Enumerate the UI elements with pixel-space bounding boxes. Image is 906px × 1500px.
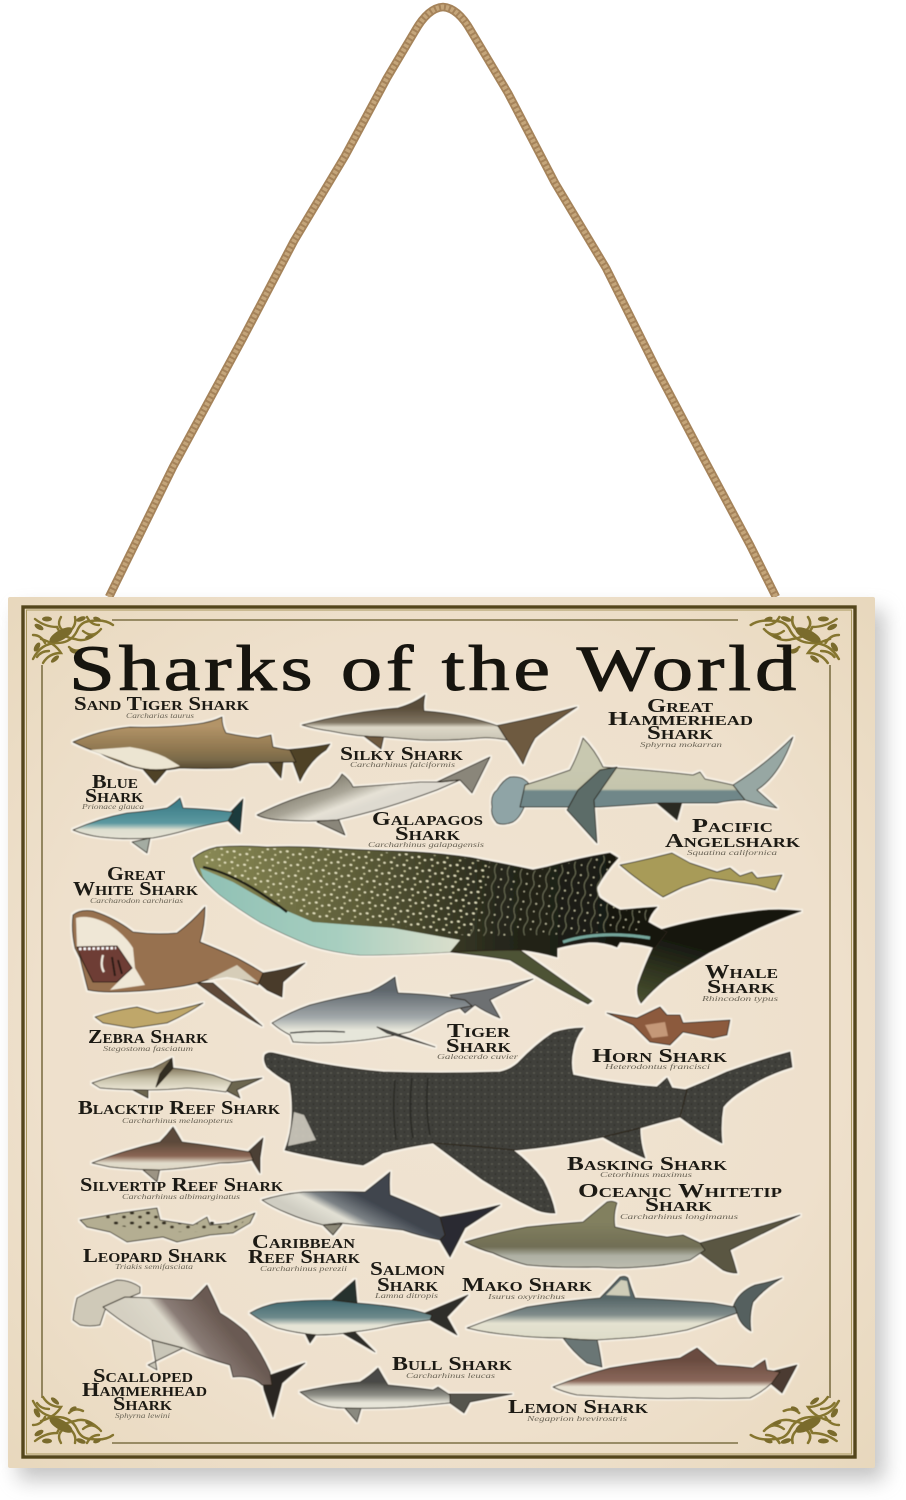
- label: great hammerhead shark: Shark: [647, 722, 713, 744]
- label: sand tiger shark: Sand Tiger Shark: [74, 693, 249, 715]
- label: oceanic whitetip shark: Carcharhinus longimanus: [620, 1213, 738, 1221]
- label: scalloped hammerhead shark: [82, 1365, 207, 1420]
- shark: pacific angelshark: [620, 853, 782, 897]
- label: tiger shark: Galeocerdo cuvier: [437, 1053, 518, 1061]
- label: great white shark: Great: [107, 863, 166, 885]
- teal belly stripe: [563, 935, 650, 942]
- label: scalloped hammerhead shark: Sphyrna lewini: [115, 1412, 170, 1420]
- label: silvertip reef shark: Carcharhinus albimarginatus: [122, 1193, 240, 1201]
- label: great white shark: White Shark: [73, 878, 198, 900]
- label: mako shark: Mako Shark: [462, 1274, 592, 1296]
- label: whale shark: [700, 961, 778, 1003]
- label: caribbean reef shark: Caribbean: [252, 1231, 355, 1253]
- label: oceanic whitetip shark: Oceanic Whitetip: [578, 1180, 783, 1202]
- title: Sharks of the World: [69, 633, 800, 705]
- label: caribbean reef shark: [248, 1231, 360, 1273]
- belly: [200, 868, 460, 955]
- label: salmon shark: Salmon: [370, 1258, 445, 1280]
- pectoral fin: [433, 1143, 555, 1213]
- label: zebra shark: Zebra Shark: [88, 1026, 208, 1048]
- label: pacific angelshark: [665, 815, 800, 857]
- all shark illustrations: [72, 695, 801, 1422]
- label: blue shark: Shark: [85, 785, 143, 807]
- label: galapagos shark: Galapagos: [372, 808, 483, 830]
- label: whale shark: Rhincodon typus: [700, 995, 778, 1003]
- shark: tiger: [272, 977, 533, 1047]
- spot pattern: [198, 848, 490, 936]
- shark: sand tiger: [73, 717, 330, 783]
- corner ornament top left: [32, 615, 113, 664]
- label: caribbean reef shark: Reef Shark: [248, 1246, 360, 1268]
- label: basking shark: [567, 1153, 727, 1179]
- shark: horn: [607, 1007, 730, 1045]
- label: horn shark: Horn Shark: [592, 1045, 727, 1067]
- shark: galapagos: [257, 757, 490, 835]
- shark: leopard: [80, 1208, 255, 1242]
- label: scalloped hammerhead shark: Scalloped: [93, 1365, 193, 1387]
- label: whale shark: Whale: [705, 961, 778, 983]
- label: galapagos shark: [368, 808, 484, 849]
- label: oceanic whitetip shark: Shark: [645, 1194, 712, 1216]
- label: oceanic whitetip shark: [578, 1180, 783, 1221]
- label: mako shark: Isurus oxyrinchus: [486, 1293, 565, 1301]
- shark: oceanic whitetip: [465, 1201, 800, 1273]
- label: silky shark: Carcharhinus falciformis: [350, 761, 455, 769]
- shark: silvertip reef: [92, 1127, 263, 1182]
- label: great hammerhead shark: Great: [647, 695, 714, 717]
- label: caribbean reef shark: Carcharhinus perezii: [260, 1265, 347, 1273]
- label: great white shark: Carcharodon carcharias: [90, 897, 183, 905]
- label: zebra shark: Stegostoma fasciatum: [103, 1045, 193, 1053]
- pectoral fin: [450, 936, 592, 1004]
- label: bull shark: Carcharhinus leucas: [406, 1372, 495, 1380]
- shark: scalloped hammerhead: [73, 1280, 305, 1417]
- label: great hammerhead shark: [608, 695, 753, 749]
- shark: whale: [193, 846, 801, 1004]
- label: galapagos shark: Shark: [395, 823, 460, 845]
- mouth: [203, 867, 287, 912]
- body: [193, 846, 667, 957]
- body: [264, 1028, 687, 1165]
- label: blacktip reef shark: Carcharhinus melanopterus: [122, 1117, 233, 1125]
- label: blue shark: Prionace glauca: [81, 803, 145, 811]
- board drop shadow: [18, 610, 884, 1480]
- label: basking shark: Basking Shark: [567, 1153, 727, 1175]
- tail and anal fin: [603, 1052, 792, 1158]
- outer border frame: [23, 607, 855, 1457]
- rear mesh pattern: [470, 854, 652, 936]
- shark: basking: [264, 1028, 792, 1213]
- label: scalloped hammerhead shark: Shark: [113, 1393, 172, 1415]
- label: great hammerhead shark: Hammerhead: [608, 708, 753, 730]
- shark: zebra: [95, 1003, 203, 1028]
- label: salmon shark: Lamna ditropis: [374, 1292, 438, 1300]
- label: blue shark: Blue: [92, 771, 138, 793]
- label: bull shark: [392, 1353, 512, 1380]
- label: bull shark: Bull Shark: [392, 1353, 512, 1375]
- tail: [637, 910, 801, 1003]
- label: lemon shark: [508, 1396, 648, 1423]
- label: pacific angelshark: Angelshark: [665, 830, 800, 852]
- label: whale shark: Shark: [707, 976, 775, 998]
- label: tiger shark: [437, 1020, 518, 1061]
- label: galapagos shark: Carcharhinus galapagensis: [368, 841, 484, 849]
- gill slits: [394, 1078, 430, 1140]
- label: tiger shark: Tiger: [447, 1020, 511, 1042]
- corner ornament top right: [751, 615, 840, 664]
- label: mako shark: [462, 1274, 592, 1301]
- shark: bull: [300, 1368, 512, 1422]
- label: leopard shark: Leopard Shark: [83, 1245, 227, 1267]
- label: leopard shark: Triakis semifasciata: [115, 1263, 194, 1271]
- shark: great hammerhead: [492, 737, 793, 843]
- label: salmon shark: [370, 1258, 445, 1300]
- label: lemon shark: Lemon Shark: [508, 1396, 648, 1418]
- shark: silky: [302, 695, 577, 764]
- label: silky shark: Silky Shark: [340, 743, 463, 765]
- wooden board: [8, 597, 875, 1468]
- label: basking shark: Cetorhinus maximus: [600, 1171, 692, 1179]
- shark: mako: [467, 1276, 782, 1367]
- jute hanging rope: [109, 7, 776, 597]
- label: horn shark: Heterodontus francisci: [603, 1063, 710, 1071]
- label: blacktip reef shark: Blacktip Reef Shark: [78, 1097, 280, 1119]
- label: tiger shark: Shark: [446, 1035, 511, 1057]
- white gills: [288, 1112, 316, 1146]
- shark: great white: [72, 907, 305, 1026]
- label: pacific angelshark: Squatina californica: [687, 849, 778, 857]
- label: pacific angelshark: Pacific: [692, 815, 773, 837]
- label: horn shark: [592, 1045, 727, 1071]
- shark: blacktip reef: [92, 1058, 262, 1098]
- label: sand tiger shark: Carcharias taurus: [126, 712, 194, 720]
- shark: lemon: [553, 1348, 797, 1398]
- label: great hammerhead shark: Sphyrna mokarran: [640, 741, 723, 749]
- label: scalloped hammerhead shark: Hammerhead: [82, 1379, 207, 1401]
- corner ornament bottom left: [32, 1396, 113, 1445]
- shark: blue: [73, 798, 243, 853]
- shark: caribbean reef: [262, 1172, 500, 1257]
- label: salmon shark: Shark: [377, 1274, 438, 1296]
- label: lemon shark: Negaprion brevirostris: [525, 1415, 627, 1423]
- label: silvertip reef shark: Silvertip Reef Shark: [80, 1174, 283, 1196]
- inner thin border lines: [42, 620, 830, 1443]
- shark: salmon: [250, 1280, 468, 1352]
- label: blue shark: [81, 771, 145, 811]
- label: great white shark: [73, 863, 198, 905]
- corner ornament bottom right: [751, 1396, 840, 1445]
